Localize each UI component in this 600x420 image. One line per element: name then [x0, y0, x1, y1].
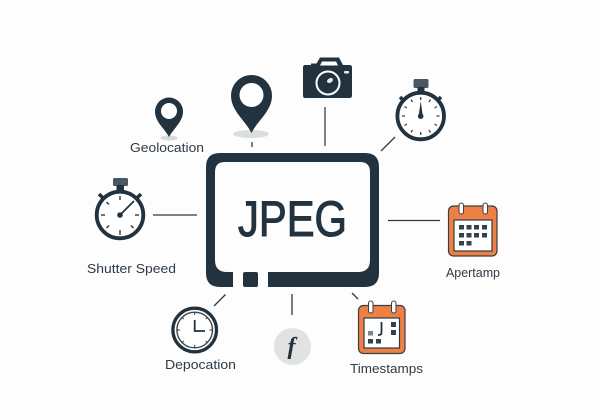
connector: calendar bottom — [352, 293, 358, 299]
heading: JPEG: JPEG — [238, 191, 347, 247]
label: Depocation: Depocation — [165, 357, 236, 372]
icon: stopwatch left — [97, 178, 143, 238]
icon: aperture f-number: f — [288, 334, 298, 360]
connector: large pin — [251, 142, 253, 147]
connector: f-stop — [291, 294, 293, 315]
icon: stopwatch top right — [397, 79, 444, 139]
label: Apertamp: Apertamp — [446, 265, 500, 280]
icon: small location pin — [155, 98, 183, 140]
connector: clock — [214, 294, 226, 306]
icon: calendar with clock hand — [358, 301, 405, 354]
central JPEG frame — [206, 153, 379, 287]
label: Geolocation: Geolocation — [130, 140, 204, 155]
icon: calendar right — [448, 203, 497, 256]
label: Timestamps: Timestamps — [350, 361, 424, 376]
icon: clock — [173, 308, 216, 352]
connector: stopwatch top right — [381, 137, 395, 151]
label: Shutter Speed: Shutter Speed — [87, 261, 176, 276]
icon: camera — [303, 58, 352, 98]
connector: stopwatch left — [153, 214, 197, 216]
icon: aperture f-number — [274, 328, 311, 365]
icon: large location pin — [231, 75, 272, 138]
connector: camera — [324, 107, 326, 146]
connector: calendar right — [388, 220, 440, 222]
